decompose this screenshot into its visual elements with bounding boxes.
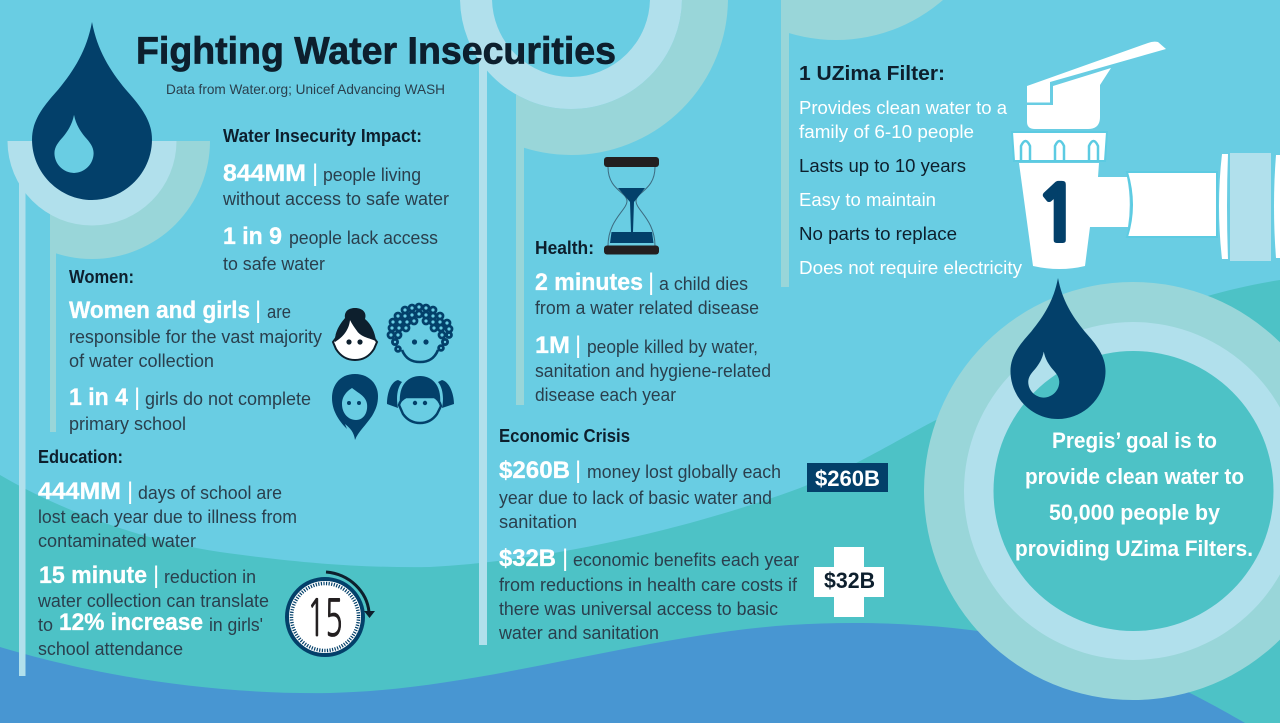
stat: $32B: economic benefits each year bbox=[573, 550, 799, 570]
teal wave bbox=[0, 280, 1280, 723]
stat: 444MM: 444MM bbox=[38, 478, 121, 505]
stat: 1M: sanitation and hygiene-related bbox=[535, 361, 771, 381]
icon: small water drop bbox=[1010, 278, 1106, 419]
stat: 1M: people killed by water, bbox=[587, 337, 758, 357]
panel: education bbox=[37, 447, 297, 659]
callout: Pregis goal: providing UZima Filters. bbox=[1015, 536, 1253, 561]
stat: $260B bbox=[499, 457, 781, 532]
icon: woman with bun bbox=[333, 308, 377, 360]
stat: 844MM: 844MM bbox=[223, 160, 306, 187]
panel: health bbox=[535, 238, 771, 405]
stat: 1M: disease each year bbox=[535, 385, 676, 405]
heading: Women: bbox=[69, 267, 134, 287]
stat: 2 minutes bbox=[535, 269, 759, 318]
arcs: top right bbox=[673, 0, 999, 287]
arcs: top left bbox=[0, 23, 210, 676]
stat: 844MM: without access to safe water bbox=[222, 189, 449, 209]
callout: Pregis goal: provide clean water to bbox=[1025, 464, 1244, 489]
concentric circles bbox=[924, 282, 1280, 700]
stat: women and girls: are bbox=[267, 302, 291, 322]
stat: 15 minute: school attendance bbox=[38, 639, 183, 659]
stat: $260B: year due to lack of basic water and bbox=[499, 488, 772, 508]
stat: women and girls: of water collection bbox=[69, 351, 214, 371]
heading: Water Insecurity Impact: bbox=[223, 126, 422, 146]
stat: 1 in 4: girls do not complete bbox=[145, 389, 311, 409]
stat: 1M: | bbox=[575, 332, 581, 359]
icon: girl with curly hair bbox=[388, 304, 452, 362]
benefit list: No parts to replace bbox=[799, 224, 957, 244]
stat: 15 minute: water collection can translate bbox=[37, 591, 269, 611]
icon: girl with long hair bbox=[332, 374, 378, 440]
stat: 844MM bbox=[222, 160, 449, 209]
stat: 1M bbox=[535, 332, 771, 405]
blue wave bbox=[0, 623, 1245, 723]
icon: water filter tap bbox=[1012, 42, 1280, 269]
stat: 444MM bbox=[38, 478, 297, 551]
panel: women bbox=[69, 267, 322, 434]
stat: $32B: | bbox=[562, 545, 568, 572]
stat: 1 in 9: to safe water bbox=[223, 254, 325, 274]
callout: Pregis goal bbox=[1015, 428, 1253, 561]
stat: 1 in 4 bbox=[69, 384, 311, 434]
stat: 15 minute: 15 minute bbox=[39, 562, 147, 589]
badge: $32B cross: $32B bbox=[824, 568, 875, 593]
heading: Economic Crisis bbox=[499, 426, 630, 446]
stat: $32B bbox=[498, 545, 799, 643]
panel: water insecurity impact bbox=[222, 126, 449, 274]
heading: Education: bbox=[38, 447, 123, 467]
stat: 1 in 4: primary school bbox=[69, 414, 186, 434]
stat: women and girls: responsible for the vast majority bbox=[69, 327, 322, 347]
badge: $32B cross bbox=[814, 547, 884, 617]
benefit list bbox=[799, 98, 1022, 278]
callout: Pregis goal: 50,000 people by bbox=[1049, 500, 1221, 525]
stat: $32B: there was universal access to basic bbox=[499, 599, 778, 619]
panel: economic crisis bbox=[498, 426, 799, 643]
stat: 15 minute: | bbox=[153, 562, 159, 589]
stat: $260B: money lost globally each bbox=[587, 462, 781, 482]
badge: $260B: $260B bbox=[815, 466, 880, 491]
stat: 444MM: contaminated water bbox=[38, 531, 196, 551]
stat: $260B: | bbox=[575, 457, 581, 484]
stat: $32B: $32B bbox=[499, 545, 556, 572]
stat: 844MM: people living bbox=[323, 165, 421, 185]
icon: hourglass bbox=[604, 157, 659, 254]
icon: stopwatch: 15 bbox=[307, 594, 343, 644]
stat: 15 minute bbox=[37, 562, 269, 659]
stat: $32B: water and sanitation bbox=[498, 623, 659, 643]
icon: girl with pigtails bbox=[387, 376, 454, 423]
benefit list: Provides clean water to a bbox=[799, 98, 1008, 118]
heading: Health: bbox=[535, 238, 594, 258]
stat: 444MM: lost each year due to illness from bbox=[38, 507, 297, 527]
panel: UZima filter bbox=[799, 63, 1022, 278]
callout: Pregis goal: Pregis’ goal is to bbox=[1052, 428, 1217, 453]
benefit list: Easy to maintain bbox=[799, 190, 936, 210]
stat: women and girls: Women and girls bbox=[69, 297, 250, 324]
stat: 1M: 1M bbox=[535, 332, 570, 359]
stat: 2 minutes: a child dies bbox=[659, 274, 748, 294]
stat: 1 in 4: | bbox=[134, 384, 140, 411]
stat: 1 in 9 bbox=[223, 223, 438, 274]
heading: 1 UZima Filter: bbox=[799, 63, 945, 85]
stat: women and girls bbox=[69, 297, 322, 371]
arcs: top centre bbox=[437, 0, 705, 645]
stat: 2 minutes: from a water related disease bbox=[535, 298, 759, 318]
stat: 1 in 9: 1 in 9 bbox=[223, 223, 282, 250]
stat: 1 in 9: people lack access bbox=[289, 228, 438, 248]
stat: women and girls: | bbox=[255, 297, 261, 324]
stat: 15 minute: 12% increase bbox=[59, 609, 203, 636]
benefit list: Lasts up to 10 years bbox=[799, 156, 966, 176]
icon: large water drop bbox=[32, 22, 152, 200]
stat: 2 minutes: 2 minutes bbox=[535, 269, 643, 296]
stat: $260B: sanitation bbox=[499, 512, 577, 532]
stat: 15 minute: to bbox=[38, 615, 53, 635]
stat: 444MM: days of school are bbox=[138, 483, 282, 503]
stat: 844MM: | bbox=[312, 160, 318, 187]
stat: 2 minutes: | bbox=[648, 269, 654, 296]
stat: 444MM: | bbox=[127, 478, 133, 505]
benefit list: family of 6-10 people bbox=[799, 122, 974, 142]
stat: 1 in 4: 1 in 4 bbox=[69, 384, 129, 411]
stat: 15 minute: in girls' bbox=[209, 615, 263, 635]
icon: water filter tap: 1 bbox=[1035, 178, 1081, 253]
source note: Data from Water.org; Unicef Advancing WASH bbox=[166, 81, 445, 97]
badge: $260B bbox=[807, 463, 888, 492]
stat: 15 minute: reduction in bbox=[164, 567, 256, 587]
stat: $260B: $260B bbox=[499, 457, 570, 484]
title: Fighting Water Insecurities bbox=[136, 30, 616, 72]
icon: stopwatch bbox=[287, 572, 375, 655]
stat: $32B: from reductions in health care costs if bbox=[499, 575, 798, 595]
benefit list: Does not require electricity bbox=[799, 258, 1022, 278]
